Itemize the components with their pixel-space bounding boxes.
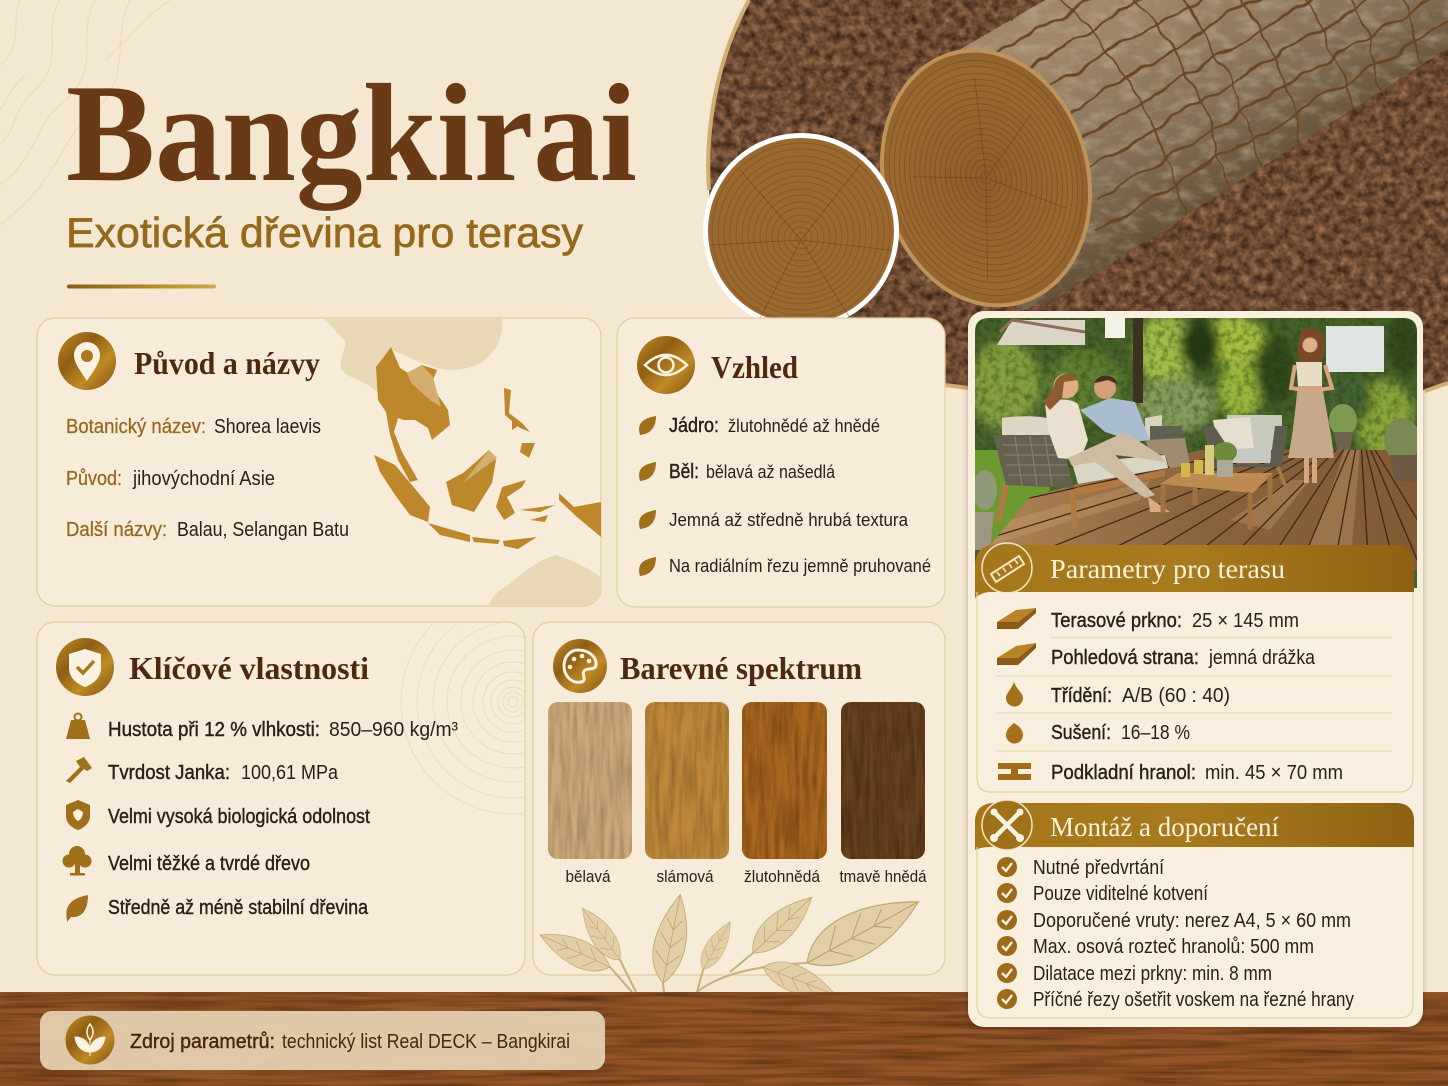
icon: sprout [66,1016,114,1064]
property: durability [66,800,370,830]
swatch: sapwood white [548,702,632,886]
row: grading [1006,682,1230,707]
parameters list [977,592,1413,792]
check item: Max. osová rozteč hranolů: 500 mm [1033,936,1314,958]
item: sapwood: bělavá až našedlá [706,461,836,482]
standing woman [1288,328,1334,483]
row: visible side: jemná drážka [1208,647,1316,669]
icon: ruler [982,543,1032,593]
row: deck board: Terasové prkno: [1051,610,1182,632]
row: joist: Podkladní hranol: [1051,762,1196,784]
icon: wrench and screwdriver [982,800,1032,850]
bottom wood band [0,992,1448,1086]
item: heartwood: Jádro: [669,415,719,437]
panel: origin and names [37,318,601,606]
armchair [1202,415,1288,485]
panel: colour spectrum [533,622,945,1006]
wood cross-section medallion [703,133,899,329]
installation ribbon: Montáž a doporučení [1050,812,1279,842]
log cut end with growth rings [852,25,1120,331]
swatch: straw [645,702,729,886]
property: heavy wood [62,846,310,876]
right card [964,310,1426,1030]
row: visible side: Pohledová strana: [1051,647,1199,669]
ground texture [708,0,1448,397]
swatch: sapwood white: bělavá [566,867,611,886]
lawn [975,450,1050,545]
property: stability [66,895,369,922]
row: grading: Třídění: [1051,685,1112,707]
hero photo: ground and log [708,0,1448,397]
title rule [67,284,216,288]
item: sapwood [639,461,836,483]
left potted plant [973,470,997,550]
field: botanical name [66,416,321,438]
item: heartwood [639,415,880,437]
swatch: yellow-brown: žlutohnědá [744,867,820,886]
item: radial cut: Na radiálním řezu jemně pruhované [669,555,931,576]
heading: Barevné spektrum [620,650,862,686]
coffee table [1160,442,1273,530]
terrace photo [975,318,1417,588]
subtitle: Exotická dřevina pro terasy [66,209,583,256]
property: hardness: Tvrdost Janka: [108,762,230,784]
property: density: 850–960 kg/m³ [329,719,458,741]
source text: technický list Real DECK – Bangkirai [282,1031,570,1053]
heading: Klíčové vlastnosti [129,650,369,686]
row: joist [998,762,1343,784]
swatch: dark brown [840,702,927,886]
source text: Zdroj parametrů: [130,1031,275,1053]
row: joist: min. 45 × 70 mm [1205,762,1343,784]
source text [130,1031,570,1053]
check item: Nutné předvrtání [1033,857,1164,879]
check item: Doporučené vruty: nerez A4, 5 × 60 mm [1033,910,1351,932]
seated woman [1043,374,1170,512]
check item: Dilatace mezi prkny: min. 8 mm [1033,963,1272,985]
gold rim of the hero [708,0,1448,391]
row: drying: 16–18 % [1121,722,1190,744]
property: heavy wood: Velmi těžké a tvrdé dřevo [108,853,310,875]
row: grading: A/B (60 : 40) [1122,685,1230,707]
row: deck board: 25 × 145 mm [1192,610,1299,632]
field: other names: Další názvy: [66,519,167,541]
swatch: straw: slámová [656,867,714,886]
swatch: dark brown: tmavě hnědá [840,867,927,886]
map of southeast Asia [324,318,601,606]
source footer pill [40,1011,605,1070]
row: drying [1006,722,1190,744]
tree ring watermark [400,622,525,814]
property: stability: Středně až méně stabilní dřevina [108,897,369,919]
icon: palette [553,639,607,693]
decorative leaf branch [539,894,920,992]
property: durability: Velmi vysoká biologická odolnost [108,806,370,828]
check item: Příčné řezy ošetřit voskem na řezné hrany [1033,989,1354,1011]
icon: location pin [58,332,116,390]
heading: Původ a názvy [134,345,320,381]
icon: shield check [56,638,114,696]
row: visible side [997,643,1316,669]
field: other names: Balau, Selangan Batu [177,519,349,541]
row: drying: Sušení: [1051,722,1111,744]
parameters ribbon [975,543,1414,598]
field: origin: jihovýchodní Asie [132,468,275,490]
field: origin: Původ: [66,468,122,490]
check item: Pouze viditelné kotvení [1033,883,1208,905]
item: sapwood: Běl: [669,461,699,483]
sofa [993,415,1182,528]
installation ribbon [975,800,1414,850]
houses [997,320,1085,345]
panel: appearance [617,318,945,607]
property: density [66,714,458,741]
parameters ribbon: Parametry pro terasu [1050,554,1286,584]
field: botanical name: Shorea laevis [214,416,321,438]
swatch: yellow-brown [742,702,827,886]
row: deck board [997,608,1299,632]
installation checklist [977,847,1413,1018]
item: texture: Jemná až středně hrubá textura [669,509,909,530]
right potted plants [1329,404,1420,481]
seated man [1080,376,1190,468]
field: botanical name: Botanický název: [66,416,206,438]
foliage [975,318,1417,450]
field: origin [66,468,275,490]
property: hardness [66,757,339,784]
pergola post [1133,317,1143,403]
property: density: Hustota při 12 % vlhkosti: [108,719,320,741]
panel: key properties [36,621,526,976]
heading: Vzhled [711,349,798,385]
title: Bangkirai [66,56,637,211]
icon: eye [637,336,695,394]
field: other names [66,519,349,541]
property: hardness: 100,61 MPa [241,762,339,784]
deck boards [990,450,1417,570]
item: heartwood: žlutohnědé až hnědé [728,415,880,436]
log body with bark [940,0,1448,312]
